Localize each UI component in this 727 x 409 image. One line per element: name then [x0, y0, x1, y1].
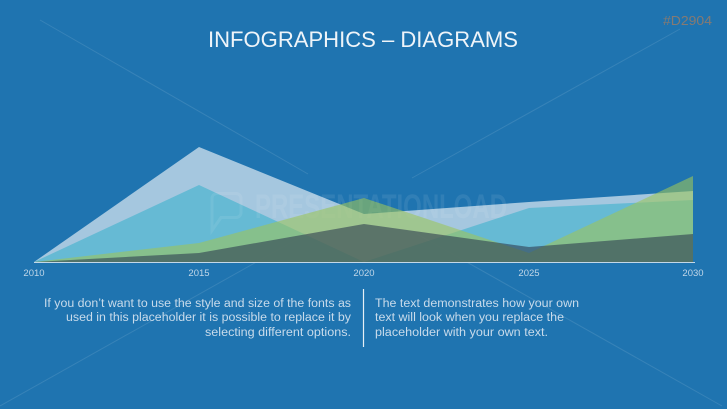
- left text block: selecting different options.: [205, 327, 351, 339]
- right text block: placeholder with your own text.: [375, 327, 548, 339]
- series: dark slate area: [34, 224, 693, 262]
- series: green area: [34, 176, 693, 262]
- left text block: If you don’t want to use the style and size of the fonts as: [44, 298, 351, 310]
- right text block: The text demonstrates how your own: [375, 298, 579, 310]
- axis labels: 2020: [353, 268, 375, 279]
- left text block: [44, 298, 351, 339]
- axis labels: [23, 268, 704, 279]
- watermark: PRESENTATIONLOAD: [255, 188, 507, 226]
- right text block: text will look when you replace the: [375, 312, 564, 324]
- right text block: [375, 298, 579, 339]
- divider: [362, 289, 364, 347]
- axis labels: 2025: [518, 268, 540, 279]
- series: pale white area: [34, 147, 693, 262]
- series: cyan area: [34, 185, 693, 262]
- axis labels: 2015: [188, 268, 210, 279]
- axis line: [34, 262, 695, 264]
- axis labels: 2030: [682, 268, 704, 279]
- axis labels: 2010: [23, 268, 45, 279]
- watermark: [212, 188, 507, 230]
- title: INFOGRAPHICS – DIAGRAMS: [208, 27, 518, 52]
- area chart: [23, 147, 704, 279]
- left text block: used in this placeholder it is possible to replace it by: [66, 312, 351, 324]
- code label: #D2904: [663, 13, 712, 28]
